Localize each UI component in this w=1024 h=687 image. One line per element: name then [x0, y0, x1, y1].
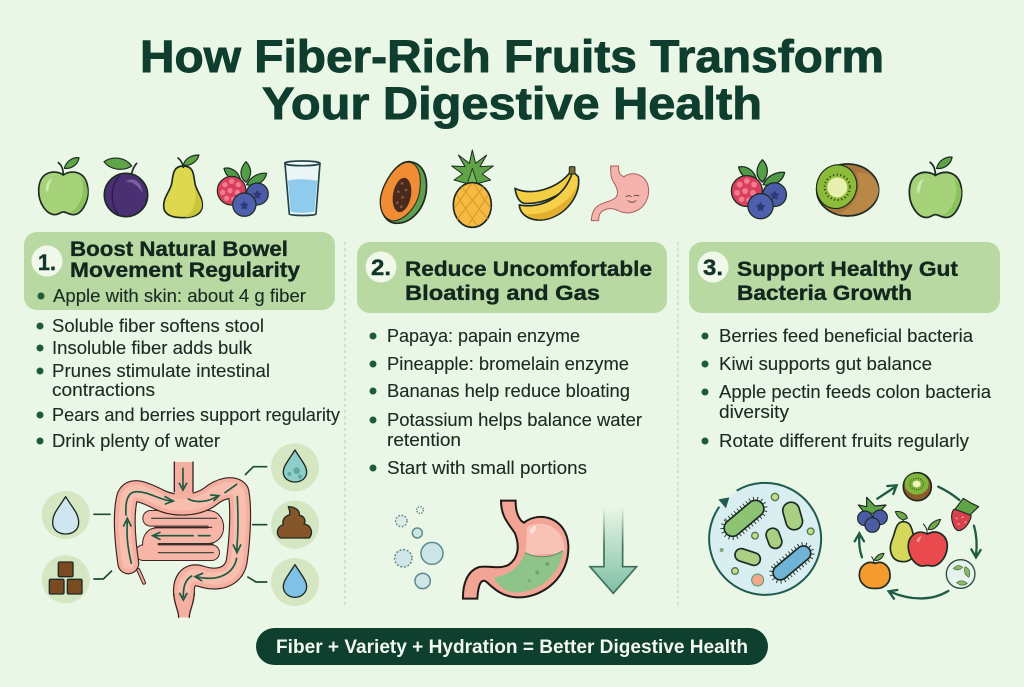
diagram: digestive tract: [42, 443, 319, 617]
bullet list: panel 2: Start with small portions: [387, 457, 587, 478]
bullet list: panel 1: Pears and berries support regularity: [52, 404, 341, 425]
icon: bananas: [515, 167, 579, 220]
title: Your Digestive Health: [262, 78, 762, 129]
cycle arrows: [855, 485, 981, 599]
heading: panel 1: Apple with skin: about 4 g fiber: [53, 285, 306, 306]
bullet list: panel 2: Bananas help reduce bloating: [387, 380, 630, 401]
icon row: apple, plum, pear, berries, water: [39, 155, 320, 218]
bullet list: panel 3: diversity: [719, 401, 790, 422]
title: [140, 31, 884, 129]
icon: berries: [731, 160, 786, 219]
heading: panel 3: [689, 242, 1000, 313]
panel: bowel regularity: [24, 155, 341, 617]
icon: red apple: [908, 519, 947, 566]
icon: orange: [859, 553, 890, 588]
icon row: papaya, pineapple, banana, stomach: [380, 150, 649, 227]
heading: panel 3: 3.: [703, 255, 723, 280]
title: How Fiber-Rich Fruits Transform: [140, 31, 884, 82]
heading: panel 3: Support Healthy Gut: [737, 258, 958, 281]
bullet list: panel 3: Apple pectin feeds colon bacteria: [719, 381, 992, 402]
heading: panel 1: [24, 232, 335, 310]
bullet list: panel 2: Papaya: papain enzyme: [387, 325, 580, 346]
heading: panel 1: Boost Natural Bowel: [70, 238, 288, 261]
bullet list: panel 3: Kiwi supports gut balance: [719, 353, 932, 374]
panel: gut bacteria: [689, 157, 1000, 599]
icon: pineapple: [452, 150, 493, 227]
icon: glass of water: [285, 161, 320, 215]
icon: kiwi: [811, 160, 879, 216]
stomach with fluid: [463, 501, 568, 599]
bullet list: panel 1: Prunes stimulate intestinal: [52, 360, 270, 381]
bullet list: panel 2: retention: [387, 429, 461, 450]
bullet list: panel 1: Drink plenty of water: [52, 430, 220, 451]
heading: panel 2: Bloating and Gas: [405, 282, 600, 305]
flow arrows: [124, 468, 241, 600]
icon: green apple: [909, 157, 962, 217]
icon: papaya: [380, 162, 427, 223]
icon: pear: [890, 511, 915, 562]
bullet list: panel 3: Rotate different fruits regularly: [719, 430, 970, 451]
bullet list: panel 2: Potassium helps balance water: [387, 409, 642, 430]
illustration: gut bacteria in a circle: [709, 483, 822, 595]
small intestine: [143, 518, 217, 553]
bullet list: panel 1: Insoluble fiber adds bulk: [52, 337, 253, 358]
icon: blueberries: [858, 497, 887, 532]
diagram: stomach, bubbles and down arrow: [395, 501, 637, 599]
icon: petri dish: [946, 560, 975, 588]
gas bubbles: [395, 507, 443, 589]
heading: panel 2: [357, 242, 667, 313]
summary banner: [256, 628, 768, 665]
illustration: fruit rotation cycle: [855, 473, 981, 599]
bullet list: panel 3: Berries feed beneficial bacteria: [719, 325, 974, 346]
icon circles and connectors: [42, 443, 319, 606]
icon: strawberry: [952, 498, 979, 531]
bullet list: panel 1: contractions: [52, 379, 155, 400]
icon row: berries, kiwi, apple: [731, 157, 962, 219]
heading: panel 2: 2.: [371, 255, 391, 280]
heading: panel 3: Bacteria Growth: [737, 282, 912, 305]
icon: kiwi: [903, 473, 931, 501]
icon: plum: [104, 158, 148, 217]
summary banner: Fiber + Variety + Hydration = Better Digestive Health: [276, 636, 748, 658]
panel: bloating and gas: [357, 150, 667, 599]
arrow: reduced bloating: [590, 507, 637, 593]
bullet list: panel 2: [370, 325, 642, 478]
icon: green apple: [39, 158, 88, 215]
icon: pear: [164, 155, 202, 218]
heading: panel 1: 1.: [38, 250, 56, 275]
icon: smiling stomach: [591, 166, 649, 221]
bullet list: panel 3: [702, 325, 992, 451]
bullet list: panel 1: [36, 315, 341, 451]
bullet list: panel 2: Pineapple: bromelain enzyme: [387, 353, 629, 374]
bullet list: panel 1: Soluble fiber softens stool: [52, 315, 264, 336]
heading: panel 1: Movement Regularity: [70, 259, 300, 282]
icon: berries: [217, 162, 268, 216]
large intestine: [125, 462, 240, 617]
heading: panel 2: Reduce Uncomfortable: [405, 258, 652, 281]
